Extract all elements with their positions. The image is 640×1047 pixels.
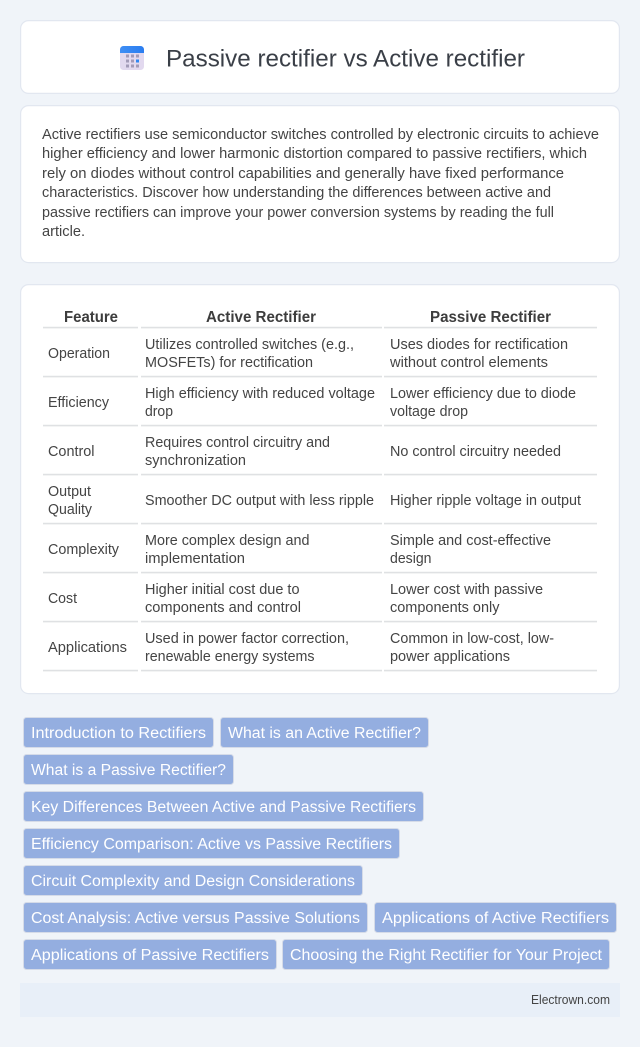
icon: calendar [120, 46, 144, 70]
table row: operation: Uses diodes for rectification [390, 337, 568, 353]
table row: cost: Lower cost with passive [390, 582, 543, 598]
table row: applications: renewable energy systems [145, 649, 314, 665]
footer: Electrown.com [531, 993, 610, 1007]
table row: efficiency: voltage drop [390, 404, 468, 420]
panel: header [21, 21, 619, 93]
table row: control: Control [48, 444, 94, 460]
table row: operation: Utilizes controlled switches (e.g., [145, 337, 354, 353]
text block: introduction paragraph: higher efficiency and lower harmonic distortion compared to passive rectifiers, which [42, 146, 587, 162]
table row: complexity: Complexity [48, 542, 120, 558]
tag: applications of passive [24, 940, 276, 970]
tag: cost analysis: Cost Analysis: Active versus Passive Solutions [31, 910, 360, 927]
table row: cost: Higher initial cost due to [145, 582, 300, 598]
table row: cost: components and control [145, 600, 301, 616]
table header row [64, 309, 551, 326]
title: Passive rectifier vs Active rectifier [166, 46, 525, 73]
tag: applications of active: Applications of Active Rectifiers [382, 910, 609, 927]
tag: passive rectifier: What is a Passive Rectifier? [31, 762, 226, 779]
table row: efficiency: drop [145, 404, 173, 420]
table row: efficiency: High efficiency with reduced voltage [145, 386, 375, 402]
text block: introduction paragraph: passive rectifiers can improve your power conversion systems by reading the full [42, 205, 554, 221]
table row: efficiency: Lower efficiency due to diode [390, 386, 576, 402]
table row: cost [48, 582, 543, 616]
table row: applications [48, 631, 554, 665]
tag: key differences [24, 792, 424, 822]
text block: introduction paragraph: article. [42, 224, 85, 240]
tag: passive rectifier [24, 754, 234, 784]
table row: applications: power applications [390, 649, 510, 665]
table row: complexity [48, 533, 551, 567]
table row: output quality: Output [48, 484, 91, 500]
table header row: Active Rectifier [206, 309, 316, 326]
table row: operation: Operation [48, 346, 110, 362]
tag: active rectifier [220, 718, 428, 748]
text block: introduction paragraph: characteristics. Discover how understanding the differences between active and [42, 185, 551, 201]
panel: comparison table [21, 285, 619, 694]
footer [20, 983, 620, 1017]
table row: control [48, 435, 561, 469]
tag: efficiency comparison: Efficiency Comparison: Active vs Passive Rectifiers [31, 836, 392, 853]
table row: efficiency: Efficiency [48, 395, 110, 411]
tag: active rectifier: What is an Active Rectifier? [228, 725, 421, 742]
tag: efficiency comparison [24, 828, 400, 858]
table row: output quality: Quality [48, 502, 93, 518]
table row: efficiency [48, 386, 576, 420]
table row: operation [48, 337, 568, 371]
table row: applications: Common in low-cost, low- [390, 631, 554, 647]
table row: control: No control circuitry needed [390, 444, 561, 460]
table row: output quality: Smoother DC output with less ripple [145, 493, 374, 509]
tag: circuit complexity: Circuit Complexity and Design Considerations [31, 873, 355, 890]
table header row: Feature [64, 309, 118, 326]
tag: circuit complexity [24, 866, 362, 896]
table row: operation: MOSFETs) for rectification [145, 355, 313, 371]
table row: control: synchronization [145, 453, 246, 469]
tag: applications of active [374, 902, 616, 932]
table row: cost: components only [390, 600, 500, 616]
panel: introduction [21, 106, 619, 263]
tag: cost analysis [24, 902, 368, 932]
table row: complexity: More complex design and [145, 533, 310, 549]
table row: cost: Cost [48, 591, 77, 607]
tag: introduction: Introduction to Rectifiers [31, 725, 206, 742]
table header row: Passive Rectifier [430, 309, 551, 326]
table row: operation: without control elements [389, 355, 548, 371]
table row: output quality [48, 484, 581, 518]
table row: complexity: Simple and cost-effective [390, 533, 551, 549]
text block: introduction paragraph [42, 127, 599, 240]
table row: output quality: Higher ripple voltage in output [390, 493, 581, 509]
tag: choosing [282, 940, 610, 970]
table row: complexity: design [390, 551, 432, 567]
tag: choosing: Choosing the Right Rectifier for Your Project [290, 947, 603, 964]
table row: applications: Applications [48, 640, 127, 656]
tag: applications of passive: Applications of Passive Rectifiers [31, 947, 269, 964]
table row: applications: Used in power factor correction, [145, 631, 349, 647]
text block: introduction paragraph: Active rectifiers use semiconductor switches controlled by electronic circuits to achieve [42, 127, 599, 143]
table row: complexity: implementation [145, 551, 245, 567]
table row: control: Requires control circuitry and [145, 435, 330, 451]
panel: table of contents tags [24, 718, 616, 970]
text block: introduction paragraph: rely on diodes without control capabilities and generally have fixed performance [42, 166, 564, 182]
tag: key differences: Key Differences Between Active and Passive Rectifiers [31, 799, 416, 816]
tag: introduction [24, 718, 214, 748]
